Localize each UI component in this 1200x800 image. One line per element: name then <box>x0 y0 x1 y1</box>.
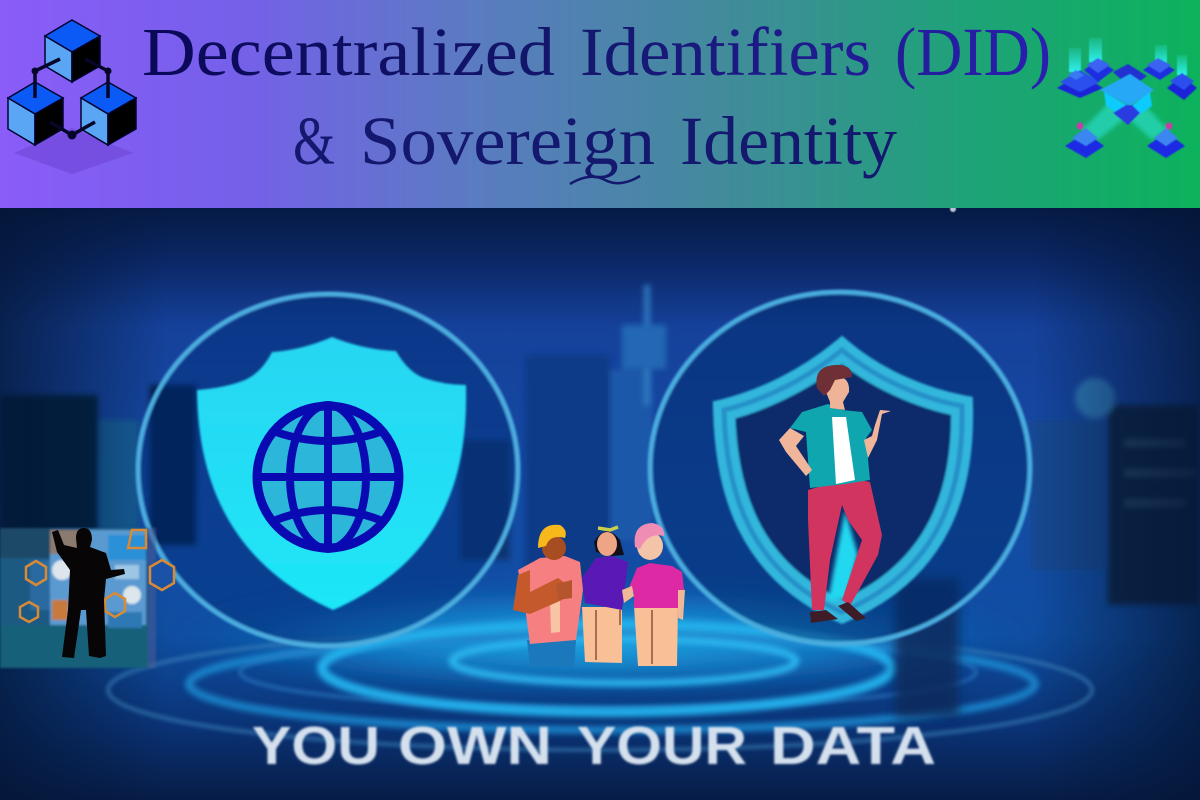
caption: you own your data: YOUR <box>577 716 747 776</box>
title line 2 <box>293 103 897 184</box>
right glowing ring <box>650 292 1030 644</box>
data wall <box>0 528 156 668</box>
shoes <box>810 610 838 623</box>
arm left <box>779 428 812 476</box>
right stacks <box>1143 58 1197 100</box>
friend three <box>622 523 685 666</box>
caption: you own your data: OWN <box>398 716 552 776</box>
white tee <box>832 417 855 484</box>
left glowing ring <box>138 294 518 646</box>
left stacks <box>1057 58 1114 98</box>
globe icon <box>257 405 399 549</box>
head <box>826 376 849 410</box>
title line 2: Sovereign <box>360 103 655 179</box>
person: silhouette at data wall <box>0 528 174 668</box>
title line 1 <box>142 14 1051 90</box>
title line 2: Identity <box>680 103 897 179</box>
people: three friends <box>513 523 685 667</box>
bottom stacks <box>1065 122 1185 158</box>
outline shield <box>724 350 962 612</box>
teal shirt <box>790 404 872 488</box>
cyan glow between legs <box>828 510 858 600</box>
left circle with shield and globe <box>138 294 518 646</box>
silhouette <box>52 528 125 658</box>
friend one <box>513 525 583 667</box>
caption: you own your data: YOU <box>252 716 380 776</box>
icon: network nodes <box>1057 38 1197 158</box>
background: blurred city scene <box>0 206 1200 800</box>
title line 2: & <box>293 103 335 179</box>
person: man in teal shirt <box>779 365 891 623</box>
centre platform <box>1113 64 1147 88</box>
floor: concentric glowing rings <box>108 578 1092 750</box>
friend two <box>582 527 628 663</box>
cyan shield <box>197 337 466 610</box>
right circle with outline shield <box>650 292 1030 644</box>
hexagons <box>20 530 174 622</box>
arm right <box>864 410 891 458</box>
legs <box>808 478 882 610</box>
caption: you own your data <box>252 716 936 776</box>
icon: blockchain cubes <box>8 20 136 174</box>
title line 1: (DID) <box>895 14 1051 90</box>
title banner <box>0 0 1200 208</box>
title line 1: Identifiers <box>580 14 871 90</box>
title line 1: Decentralized <box>142 14 555 90</box>
caption: you own your data: DATA <box>770 716 936 776</box>
